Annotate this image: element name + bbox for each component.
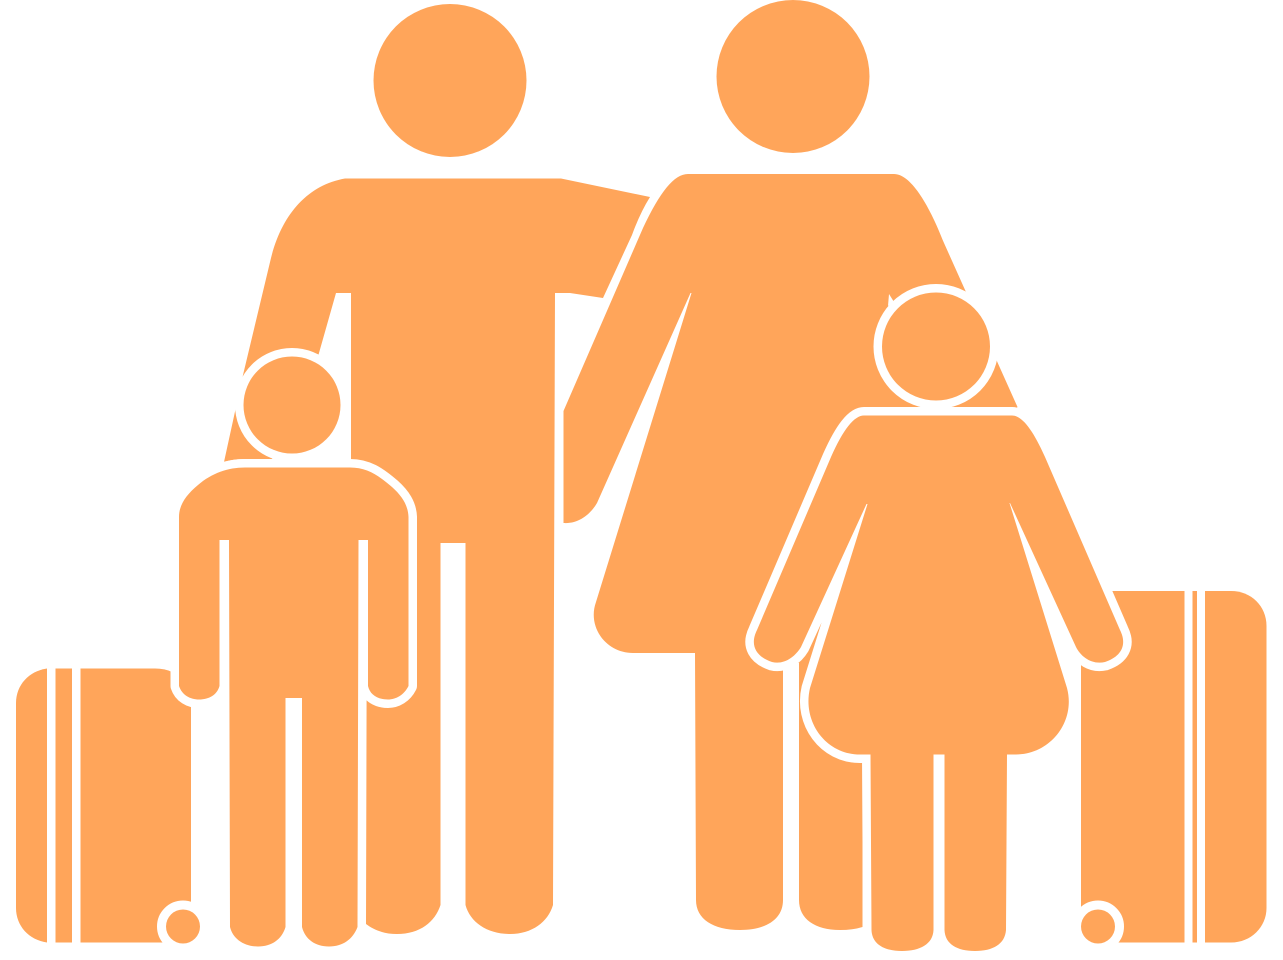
boy head bbox=[244, 356, 340, 454]
icon: right suitcase bbox=[1081, 591, 1266, 942]
figure: father bbox=[224, 4, 650, 934]
nick at mother's inner arm bbox=[888, 294, 894, 306]
father head bbox=[374, 4, 526, 157]
girl head bbox=[882, 292, 990, 400]
figure: mother bbox=[564, 0, 1018, 930]
mother body bbox=[564, 174, 1018, 930]
icon: right suitcase wheel bbox=[1081, 910, 1115, 944]
icon: left suitcase bbox=[16, 668, 191, 942]
figure: boy bbox=[179, 356, 408, 946]
figure: girl bbox=[754, 292, 1123, 951]
icon: left suitcase wheel bbox=[166, 910, 200, 944]
mother head bbox=[716, 0, 870, 153]
father body bbox=[224, 178, 650, 934]
boy body bbox=[179, 468, 408, 946]
girl body bbox=[754, 416, 1123, 951]
